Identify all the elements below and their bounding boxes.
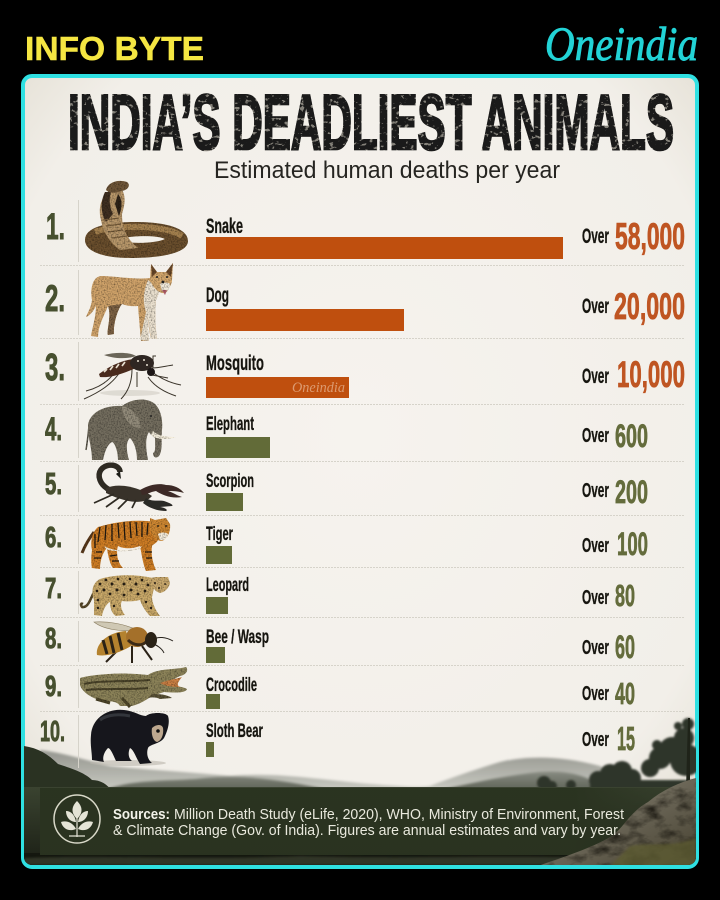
- value: Over: [582, 295, 609, 318]
- rock outcrop: [538, 778, 696, 866]
- logo: Oneindia: Oneindia: [545, 18, 698, 71]
- value: Over: [582, 535, 609, 557]
- row 4: Elephant: 600: [615, 418, 648, 454]
- value: Over: [582, 480, 609, 502]
- icon: tiger: [82, 518, 170, 571]
- row 5: Scorpion: 200: [615, 474, 648, 510]
- icon: leopard: [81, 575, 170, 616]
- rank: 7.: [45, 573, 62, 605]
- row 10: Sloth Bear: [40, 710, 635, 766]
- icon: leaf emblem: [54, 795, 100, 843]
- rank: 3.: [45, 347, 65, 389]
- watermark: Oneindia: [292, 380, 345, 396]
- dividers and rank rule: [40, 200, 685, 768]
- row 9: Crocodile: 40: [615, 676, 635, 711]
- text block: sources: Sources:: [113, 807, 170, 823]
- row 7: Leopard: [45, 573, 635, 616]
- row 1: Snake: [46, 181, 685, 259]
- bar: [206, 597, 228, 614]
- value: Over: [582, 225, 609, 248]
- source panel: [40, 788, 670, 855]
- label: Mosquito: [206, 352, 264, 375]
- bar: [206, 742, 214, 757]
- bar: [206, 437, 270, 458]
- value: Over: [582, 425, 609, 447]
- rank: 4.: [45, 411, 62, 447]
- row 3: Mosquito: [45, 347, 685, 399]
- row 8: Bee / Wasp: [45, 622, 635, 665]
- label: Snake: [206, 215, 243, 238]
- bar: [206, 377, 349, 398]
- value: Over: [582, 637, 609, 659]
- row 5: Scorpion: [45, 465, 648, 511]
- value: Over: [582, 683, 609, 705]
- value: Over: [582, 729, 609, 751]
- rank: 2.: [45, 278, 65, 319]
- bar: [206, 237, 563, 259]
- row 7: Leopard: 80: [615, 578, 635, 613]
- landscape: misty forest and rock: [24, 718, 702, 866]
- bar: [206, 546, 232, 564]
- label: Crocodile: [206, 675, 257, 696]
- row 4: Elephant: [45, 400, 648, 460]
- label: Dog: [206, 284, 229, 307]
- row 6: Tiger: [45, 518, 648, 571]
- rank: 10.: [40, 716, 65, 748]
- value: Over: [582, 587, 609, 609]
- row 9: Crocodile: [45, 667, 635, 711]
- row 2: Dog: [45, 263, 685, 341]
- rank: 8.: [45, 623, 62, 655]
- rank: 5.: [45, 466, 62, 501]
- icon: cobra: [85, 181, 188, 258]
- bar: [206, 493, 243, 511]
- text block: sources: & Climate Change (Gov. of India). Figures are annual estimates and vary by year.: [113, 823, 621, 839]
- row 6: Tiger: 100: [617, 526, 648, 562]
- label: Sloth Bear: [206, 721, 263, 742]
- text: 15: [617, 720, 635, 757]
- label: Bee / Wasp: [206, 627, 269, 648]
- subtitle: Estimated human deaths per year: [214, 157, 560, 184]
- rank: 6.: [45, 522, 62, 554]
- bar: [206, 309, 404, 331]
- icon: elephant: [86, 400, 176, 460]
- value: Over: [582, 365, 609, 388]
- label: Elephant: [206, 414, 254, 435]
- bar: [206, 694, 220, 709]
- rank: 9.: [45, 671, 62, 703]
- icon: mosquito: [84, 353, 181, 399]
- icon: dog: [86, 263, 173, 341]
- label: Scorpion: [206, 471, 254, 492]
- label: Tiger: [206, 524, 233, 545]
- label: Leopard: [206, 575, 249, 596]
- icon: scorpion: [94, 465, 184, 511]
- text block: sources: Million Death Study (eLife, 2020), WHO, Ministry of Environment, Forest: [174, 807, 624, 823]
- bar: [206, 647, 225, 663]
- heading: INFO BYTE: INFO BYTE: [25, 30, 204, 67]
- rank: 1.: [46, 206, 65, 247]
- icon: crocodile: [80, 667, 187, 707]
- icon: bee: [94, 622, 173, 663]
- icon: sloth bear: [90, 710, 169, 766]
- row 8: Bee / Wasp: 60: [615, 629, 635, 665]
